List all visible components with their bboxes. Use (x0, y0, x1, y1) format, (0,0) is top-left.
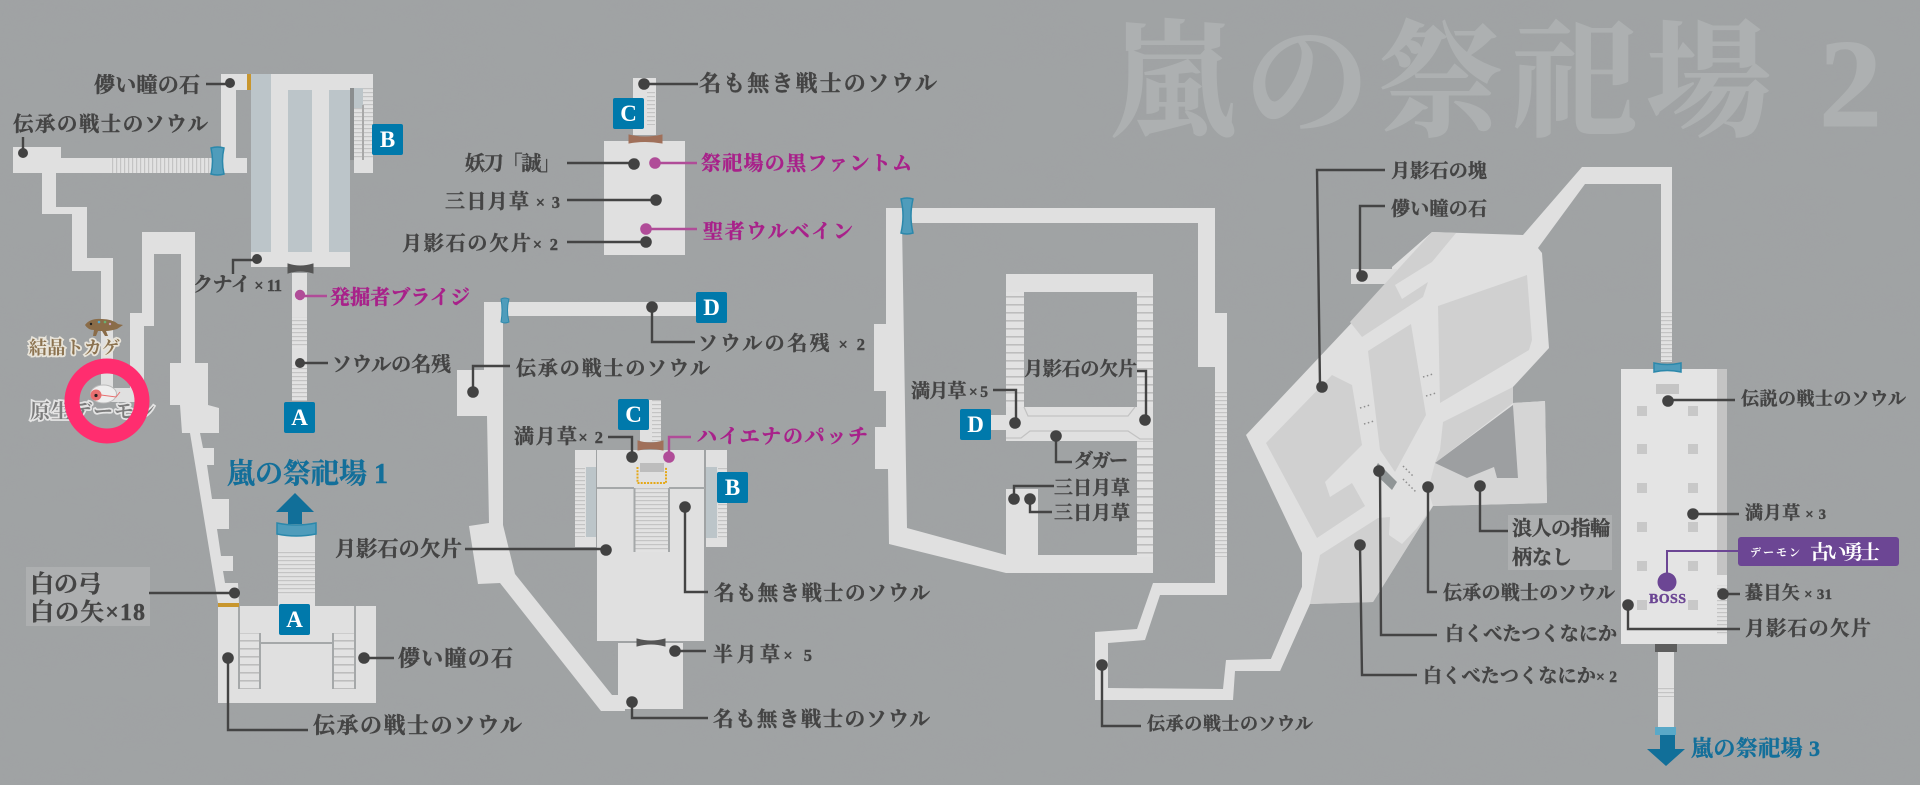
badge B south: B (725, 475, 740, 500)
callout: 満月草 ×3: 満月草 × 3 (1745, 503, 1826, 523)
icon: dark door (1655, 644, 1677, 652)
icon: dark door (637, 639, 665, 646)
callout: 月影石の欠片 ×2 (402, 232, 652, 255)
callout: 伝承の戦士のソウル (13, 113, 208, 158)
badge C south: C (625, 402, 642, 427)
badge C north (613, 98, 644, 129)
callout: 三日月草 1: 三日月草 (1054, 477, 1130, 499)
main hall (575, 400, 727, 709)
callout: 半月草 ×5 (669, 643, 812, 666)
callout: 伝承の戦士のソウル south: 伝承の戦士のソウル (313, 713, 522, 738)
callout: クナイ (193, 254, 282, 296)
icon: brown door north (629, 135, 662, 143)
badge C south (618, 399, 649, 430)
south corridor (1655, 652, 1676, 735)
callout: 満月草 ×2: 満月草× 2 (514, 425, 603, 448)
callout: 月影石の欠片: 月影石の欠片 (1024, 358, 1137, 380)
callout: 浪人の指輪 柄なし: 浪人の指輪 (1512, 517, 1610, 540)
badge A lower: A (286, 607, 303, 632)
icon: primal demon (30, 385, 155, 423)
callout: ハイエナのパッチ: ハイエナのパッチ (697, 426, 868, 448)
boss marker: デーモン (1750, 546, 1800, 559)
title: 嵐の祭祀場 2 (1110, 15, 1882, 154)
boss marker: BOSS (1649, 592, 1686, 607)
lower corridor (292, 273, 307, 401)
callout: 三日月草: 三日月草 × 3 (445, 190, 560, 213)
pools (1266, 232, 1532, 604)
badge D: D (967, 412, 984, 437)
callout: 嵐の祭祀場 3: 嵐の祭祀場 3 (1691, 736, 1820, 761)
callout: 三日月草 2 (1024, 493, 1130, 524)
callout: 名も無き戦士のソウル mid: 名も無き戦士のソウル (714, 582, 930, 605)
badge A upper: A (291, 405, 308, 430)
callout: 儚い瞳の石 south: 儚い瞳の石 (398, 646, 513, 671)
callout: 伝承の戦士のソウル (1096, 659, 1313, 734)
callout: 三日月草 2: 三日月草 (1054, 502, 1130, 524)
callout: 満月草 ×2 (514, 425, 638, 463)
callout: 満月草 ×5: 満月草 × 5 (911, 380, 988, 402)
callout: 妖刀「誠」: 妖刀「誠」 (465, 152, 560, 175)
callout: 白の弓 白の矢 (26, 567, 240, 626)
north room (604, 78, 685, 255)
callout: 白くべたつくなにか (1373, 465, 1617, 645)
icon: primal demon: 原生デーモン (30, 400, 155, 423)
callout: 三日月草 1 (1008, 477, 1130, 505)
icon: crystal lizard: 結晶トカゲ (29, 338, 120, 358)
callout: 月影石の欠片 ×2: 月影石の欠片× 2 (402, 232, 558, 255)
callout: 伝承の戦士のソウル: 伝承の戦士のソウル (1147, 714, 1313, 734)
badge D (960, 409, 991, 440)
callout: 名も無き戦士のソウル north: 名も無き戦士のソウル (699, 71, 937, 96)
callout: ダガー (1050, 430, 1128, 472)
badge B: B (380, 127, 395, 152)
dotted marks (1360, 374, 1436, 493)
upper hall floor (13, 74, 373, 267)
room floor (1621, 369, 1727, 644)
west corridor (457, 302, 696, 711)
east stairs (1215, 390, 1227, 557)
panel: map 1 (13, 73, 522, 738)
icon: up arrow to area 1 (276, 493, 314, 524)
callout: 月影石の欠片 (1024, 358, 1151, 426)
callout: 満月草 ×3 (1687, 503, 1826, 523)
icon: down arrow to area 3 (1647, 735, 1685, 766)
callout: 名も無き戦士のソウル south: 名も無き戦士のソウル (713, 708, 930, 731)
callout: 伝承の戦士のソウル south (222, 652, 522, 738)
badge B (372, 124, 403, 155)
callout: 月影石の塊: 月影石の塊 (1391, 160, 1487, 182)
callout: 満月草 ×5 (911, 380, 1021, 429)
callout: 祭祀場の黒ファントム: 祭祀場の黒ファントム (701, 152, 912, 175)
badge C north: C (620, 101, 637, 126)
outer corridor (874, 208, 1310, 700)
callout: 儚い瞳の石 (1356, 198, 1487, 282)
callout: 儚い瞳の石: 儚い瞳の石 (1391, 198, 1487, 220)
main floor (1246, 167, 1672, 671)
callout: 浪人の指輪 柄なし: 柄なし (1512, 546, 1572, 569)
callout: ソウルの名残 ×2: ソウルの名残 × 2 (698, 332, 865, 355)
callout: 伝承の戦士のソウル (467, 357, 710, 398)
callout: 伝承の戦士のソウル: 伝承の戦士のソウル (13, 113, 208, 136)
badge B south (717, 472, 748, 503)
grey slab (1373, 463, 1397, 490)
callout: ソウルの名残 ×2 (646, 301, 865, 355)
callout: 白くべたつくなにか: 白くべたつくなにか (1445, 623, 1617, 645)
inner loop (991, 274, 1153, 573)
highlight ring (72, 366, 142, 436)
icon: blue door (1654, 363, 1681, 372)
callout: 妖刀「誠」 (465, 152, 640, 175)
callout: 伝説の戦士のソウル: 伝説の戦士のソウル (1741, 389, 1906, 409)
panel: map 4 (1246, 160, 1672, 687)
callout: 月影石の欠片 (335, 537, 612, 561)
callout: 三日月草 (445, 190, 662, 213)
callout: 嵐の祭祀場 1: 嵐の祭祀場 1 (227, 457, 388, 490)
jagged passage (130, 232, 239, 603)
callout: 発掘者ブライジ: 発掘者ブライジ (330, 286, 470, 309)
panel: boss room (1621, 363, 1906, 766)
panel: map 3 (874, 198, 1313, 734)
south hall (218, 535, 376, 703)
callout: 伝説の戦士のソウル (1662, 389, 1906, 409)
callout: 月影石の欠片 (1622, 599, 1871, 640)
icon: brown door south (638, 441, 663, 450)
callout: ハイエナのパッチ (663, 426, 868, 463)
callout: 蟇目矢 ×31: 蟇目矢 × 31 (1745, 583, 1832, 603)
east block (1428, 401, 1547, 506)
callout: 白くべたつくなにか ×2: 白くべたつくなにか× 2 (1423, 665, 1617, 687)
callout: 伝承の戦士のソウル: 伝承の戦士のソウル (1443, 582, 1615, 604)
west passage (42, 173, 144, 402)
side tab (1351, 269, 1397, 284)
badge D (696, 292, 727, 323)
callout: ダガー: ダガー (1074, 450, 1128, 472)
panel: map 2 (335, 71, 937, 731)
callout: 白の弓 白の矢: 白の矢×18 (30, 599, 145, 626)
icon: blue door (211, 147, 224, 175)
badge A upper (284, 402, 315, 433)
callout: 儚い瞳の石: 儚い瞳の石 (94, 73, 200, 97)
callout: 伝承の戦士のソウル: 伝承の戦士のソウル (516, 357, 710, 380)
icon: blue door (901, 198, 913, 234)
icon: blue door south (277, 523, 316, 536)
callout: 伝承の戦士のソウル (1422, 481, 1615, 604)
callout: 半月草 ×5: 半月草× 5 (713, 643, 812, 666)
callout: 白くべたつくなにか ×2 (1354, 539, 1617, 687)
callout: 白の弓 白の矢: 白の弓 (30, 571, 102, 598)
callout: クナイ: クナイ × 11 (193, 274, 282, 296)
stripes (1661, 310, 1672, 362)
callout: 聖者ウルベイン: 聖者ウルベイン (703, 220, 853, 243)
callout: ソウルの名残: ソウルの名残 (332, 353, 451, 376)
icon: blue door west (501, 298, 509, 323)
boss marker: 古い勇士 (1810, 541, 1880, 564)
callout: 月影石の欠片: 月影石の欠片 (335, 537, 462, 561)
callout: 月影石の欠片: 月影石の欠片 (1745, 617, 1871, 640)
callout: 名も無き戦士のソウル south (626, 696, 930, 731)
callout: 名も無き戦士のソウル mid (679, 501, 930, 605)
icon: dark door (288, 264, 313, 273)
callout: 聖者ウルベイン (640, 220, 853, 243)
callout: 月影石の塊 (1316, 160, 1487, 393)
badge A lower (279, 604, 310, 635)
callout: 浪人の指輪 柄なし (1474, 480, 1612, 570)
icon: crystal lizard (29, 319, 123, 358)
badge D: D (703, 295, 720, 320)
boss marker (1649, 537, 1899, 607)
courtyard gap (1435, 405, 1518, 478)
